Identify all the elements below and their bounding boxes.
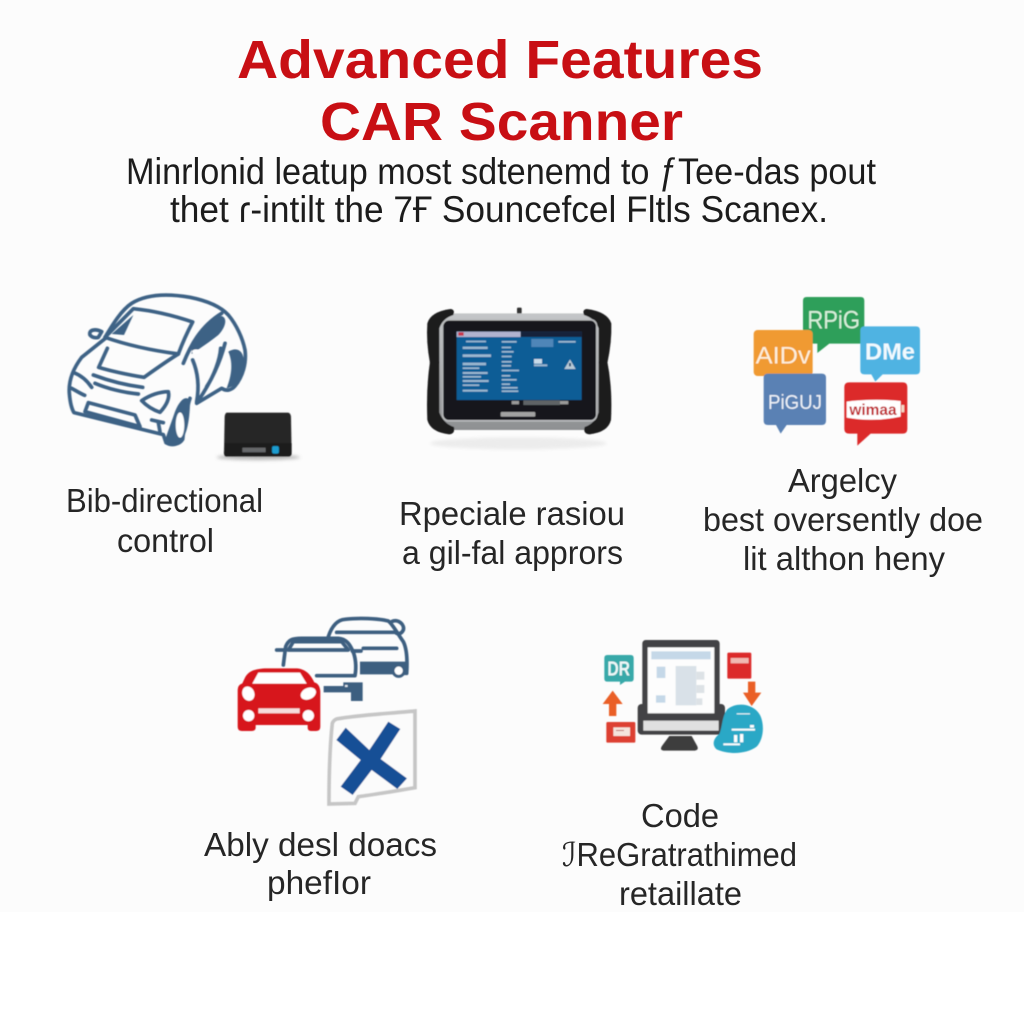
panel: speech bubbles [703,297,983,577]
monitor [661,736,698,751]
icon: diagnostic tablet [427,308,611,449]
icon: outlined car with OBD dongle [69,295,300,460]
car body [69,295,245,444]
label: tablet: Rpeciale rasiou [399,495,625,532]
label: code [562,797,797,912]
red car [238,668,320,731]
label: bi-directional control: Bib-directional [66,482,263,519]
label: code: retaillate [619,875,742,912]
light blue bubble: DMe [865,339,915,365]
tablet nav bar [457,400,582,406]
blue-grey bubble [764,374,826,434]
title [237,30,763,152]
title: Advanced Features [237,30,763,90]
green bubble [803,297,864,353]
middle car [277,638,361,676]
bottom-left badge [606,722,635,743]
panel: code monitor [562,640,797,912]
top-right badge [727,653,751,679]
label: tablet [399,495,625,571]
green bubble: RPiG [807,307,860,334]
label: cars [204,826,437,901]
arrow down [743,682,761,706]
icon: cars and X tile [238,618,415,804]
icon: colored language bubbles [754,297,920,446]
blue-grey bubble: PiGUJ [768,392,822,414]
label: tablet: a gil-fal apprors [402,534,623,571]
label: cars: Ably desl doacs [204,826,437,863]
label: bubbles: lit althon heny [743,540,945,577]
label: bi-directional control [66,482,263,559]
label: bubbles: Argelcy [788,462,897,499]
car dark fills [112,315,244,444]
rubber corners [427,309,611,434]
subtitle text: thet ɾ-intilt the 7Ғ Souncefcel Fltls Scanex. [170,189,828,230]
panel: multiple cars [204,618,437,901]
label: bubbles: best oversently doe [703,501,983,538]
panel: scan tablet [399,308,625,571]
DR badge: DR [607,659,630,681]
teal globe [714,705,763,753]
orange bubble: AIDv [756,343,811,370]
orange bubble [754,330,813,376]
red bubble [844,382,907,446]
label: cars: phefIor [267,864,371,901]
label: bubbles [703,462,983,577]
label: code: ℐReGratrathimed [562,836,797,873]
arrow up [603,691,623,716]
DR badge [604,655,634,685]
rear car [328,618,407,673]
label: code: Code [641,797,719,834]
title: CAR Scanner [320,92,683,152]
red bubble: wimaa [848,402,897,419]
tablet screen [457,332,582,400]
label: bi-directional control: control [117,522,214,559]
icon: monitor with badges and arrows [603,640,763,753]
light blue bubble [860,326,920,382]
panel: bi-directional control [66,295,300,559]
X tile [329,711,415,804]
subtitle text: Minrlonid leatup most sdtenemd to ƒTee-das pout [126,151,877,192]
OBD dongle [217,455,300,460]
subtitle text [126,151,877,230]
